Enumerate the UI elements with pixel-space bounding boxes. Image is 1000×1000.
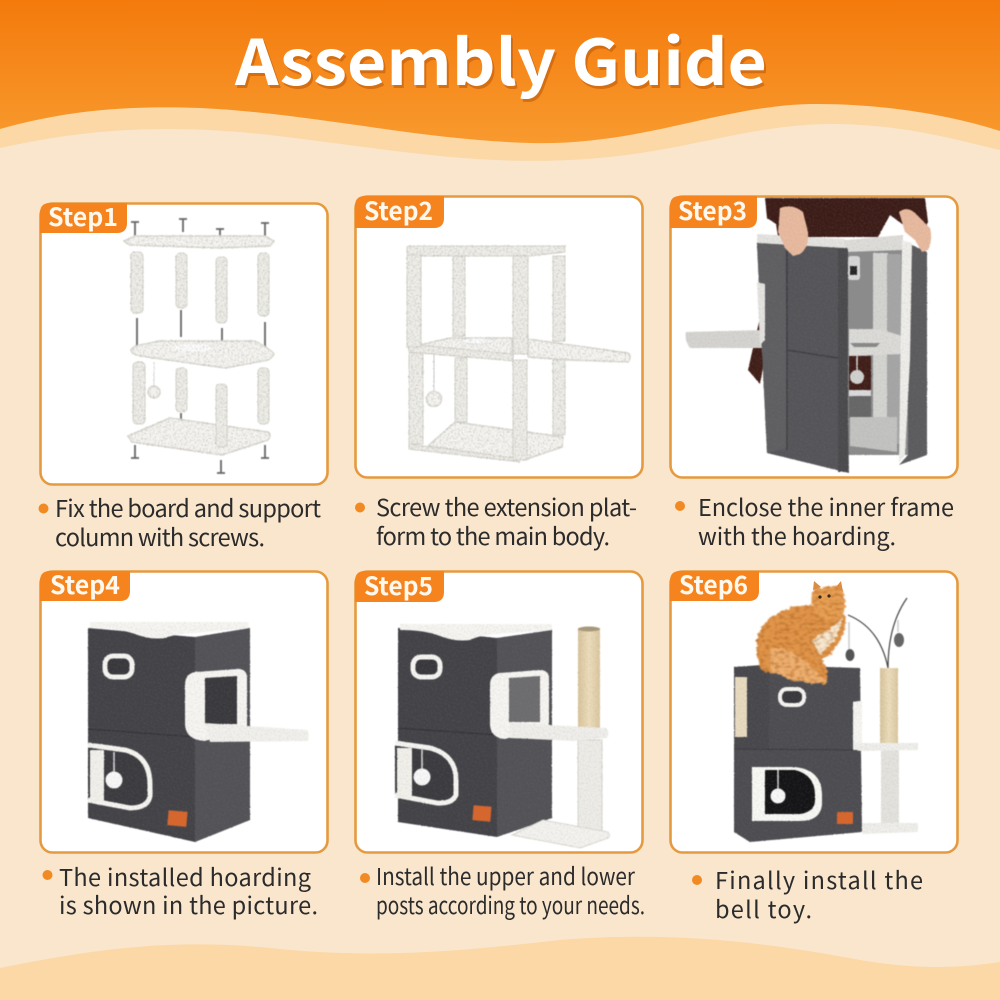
- step 4 caption: The installed hoarding: [59, 859, 311, 893]
- step 1 caption: Fix the board and support: [55, 490, 321, 524]
- bottom wave: [0, 937, 1000, 1000]
- step 3 caption: with the hoarding.: [698, 518, 896, 552]
- step 3 caption: [675, 489, 954, 552]
- panel: step 2: [355, 192, 642, 478]
- step 2 tab: Step2: [364, 192, 433, 228]
- panel: step 6: [670, 566, 958, 852]
- step 1 tab: Step1: [48, 198, 118, 234]
- step 1 caption: [38, 490, 321, 553]
- step 2 caption: [355, 489, 637, 552]
- step 4 caption: is shown in the picture.: [59, 887, 318, 921]
- title: Assembly Guide: [236, 16, 769, 107]
- step 3 caption: Enclose the inner frame: [698, 489, 954, 523]
- step 6 bell toy: [846, 598, 907, 668]
- step 4 tab: Step4: [50, 566, 120, 602]
- step 5 caption: posts according to your needs.: [376, 887, 645, 921]
- step 6 tab: Step6: [679, 566, 748, 602]
- step 3 tab: Step3: [678, 192, 747, 228]
- step 1 caption: column with screws.: [55, 519, 265, 553]
- step 6 cat face: [813, 581, 843, 599]
- step 6 cat house and posts: [734, 665, 918, 842]
- step 5 caption: Install the upper and lower: [376, 858, 636, 892]
- step 5 tab: Step5: [364, 567, 433, 603]
- step 5 caption: [360, 858, 645, 921]
- step 1 boards and posts: [124, 236, 274, 455]
- panel: step 3: [670, 192, 958, 478]
- panel: step 5: [355, 567, 642, 852]
- step 4 cat house: [88, 622, 309, 842]
- step 2 caption: form to the main body.: [376, 518, 610, 552]
- step 6 caption: bell toy.: [715, 891, 812, 925]
- step 2 caption: Screw the extension plat-: [376, 489, 637, 523]
- step 6 caption: [692, 862, 923, 925]
- light wave band under banner: [0, 0, 1000, 161]
- panel: step 1: [40, 198, 328, 484]
- step 1 screws and rods: [131, 219, 269, 473]
- step 5 cat house with posts: [395, 624, 610, 848]
- step 3 person and enclosure: [686, 198, 931, 473]
- step 2 frame: [407, 246, 630, 462]
- panel: step 4: [40, 566, 328, 852]
- step 6 caption: Finally install the: [715, 862, 923, 896]
- header banner: [0, 0, 1000, 143]
- title: Assembly Guide: [234, 13, 767, 104]
- step 4 caption: [42, 859, 318, 921]
- step 6 cat: [757, 586, 846, 684]
